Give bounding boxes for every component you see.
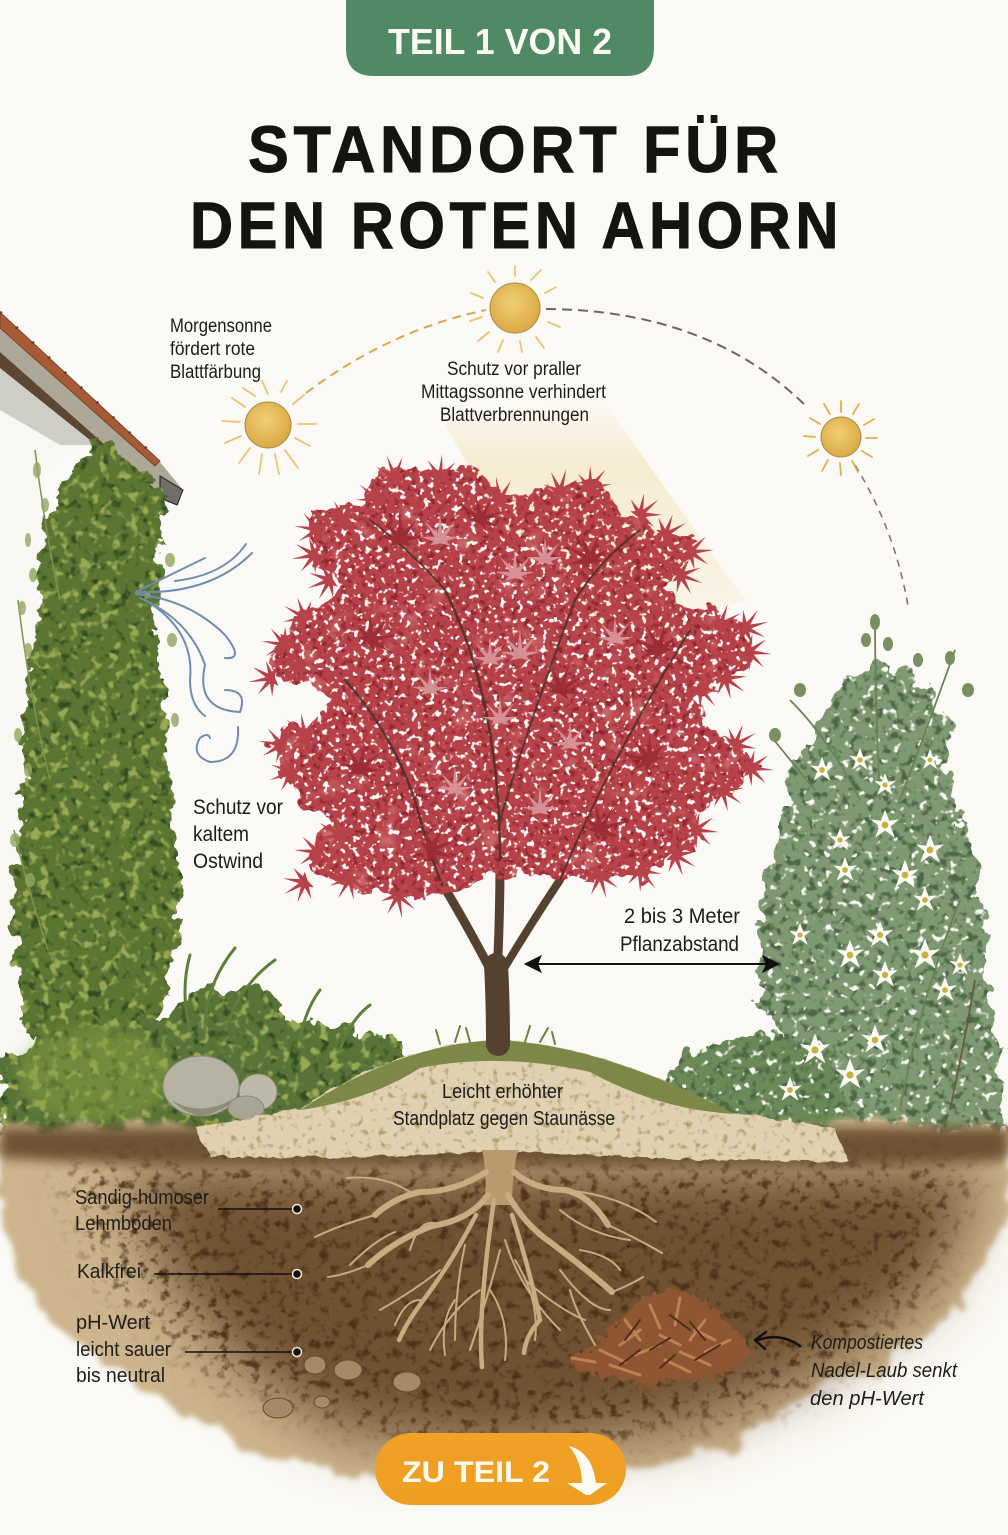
label: planting distance: Pflanzabstand <box>620 932 739 956</box>
branches <box>345 520 690 880</box>
soil stones <box>263 1356 421 1418</box>
raised planting mound <box>195 1040 848 1162</box>
label: pH value: pH-Wert <box>76 1311 150 1334</box>
label: wind protection: kaltem <box>193 822 249 846</box>
double arrow: distance <box>526 957 778 971</box>
label: pH value: bis neutral <box>76 1364 165 1387</box>
compost pile <box>566 1288 752 1384</box>
label: sandy loam soil <box>75 1186 302 1235</box>
label: wind protection <box>193 795 283 873</box>
icon: down arrow <box>567 1446 607 1495</box>
label: pH value: leicht sauer <box>76 1338 171 1361</box>
label: midday sun: Schutz vor praller <box>447 359 582 380</box>
sun arc path <box>306 309 908 606</box>
highlight leaves <box>412 514 633 815</box>
sunlight beam <box>445 405 745 640</box>
label: morning sun: Morgensonne <box>170 316 272 337</box>
label: wind protection: Ostwind <box>193 849 263 873</box>
label: pH value <box>76 1311 302 1387</box>
label: morning sun <box>170 316 272 383</box>
icon: midday sun <box>470 266 560 352</box>
title: DEN ROTEN AHORN <box>190 188 843 262</box>
trunk and lower limbs <box>440 860 560 1044</box>
tree <box>245 449 775 1044</box>
fringe leaves <box>245 449 775 922</box>
label: morning sun: fördert rote <box>170 339 255 360</box>
rocks <box>163 1056 277 1120</box>
label: compost: Nadel-Laub senkt <box>811 1359 958 1382</box>
house wall and roof <box>0 312 183 1080</box>
label: sandy loam soil: Sandig-humoser <box>75 1186 209 1209</box>
title: STANDORT FÜR <box>248 112 783 186</box>
button: Zu Teil 2 <box>375 1433 626 1505</box>
label: wind protection: Schutz vor <box>193 795 283 819</box>
badge: Teil 1 von 2: TEIL 1 VON 2 <box>388 21 612 62</box>
label: raised position: Leicht erhöhter <box>442 1081 563 1103</box>
badge: Teil 1 von 2 <box>346 0 654 76</box>
soil cross-section <box>0 1128 1008 1480</box>
label: midday sun <box>421 359 607 426</box>
right flowering shrub <box>625 614 1008 1140</box>
button: Zu Teil 2: ZU TEIL 2 <box>402 1456 550 1489</box>
arrow: compost callout <box>755 1332 800 1349</box>
label: lime free <box>77 1260 302 1283</box>
icon: morning sun <box>222 381 316 474</box>
label: compost <box>810 1331 958 1410</box>
label: raised position <box>393 1081 615 1130</box>
label: lime free: Kalkfrei <box>77 1260 141 1283</box>
ivy on wall <box>10 436 182 1040</box>
roots <box>315 1150 662 1367</box>
label: sandy loam soil: Lehmboden <box>75 1212 172 1235</box>
icon: cold east wind <box>136 544 252 762</box>
label: raised position: Standplatz gegen Staunässe <box>393 1108 615 1130</box>
mid-tone inner leaves <box>338 487 682 872</box>
title <box>190 112 843 262</box>
grass tuft at trunk base <box>436 1026 555 1044</box>
label: planting distance: 2 bis 3 Meter <box>624 904 740 928</box>
label: compost: Kompostiertes <box>811 1331 923 1354</box>
label: midday sun: Blattverbrennungen <box>440 405 589 426</box>
crown silhouette <box>270 470 752 895</box>
label: midday sun: Mittagssonne verhindert <box>421 382 607 403</box>
label: morning sun: Blattfärbung <box>170 362 261 383</box>
label: planting distance <box>620 904 740 956</box>
label: compost: den pH-Wert <box>810 1387 925 1410</box>
icon: evening sun <box>804 401 877 475</box>
low garden plants <box>0 948 420 1140</box>
